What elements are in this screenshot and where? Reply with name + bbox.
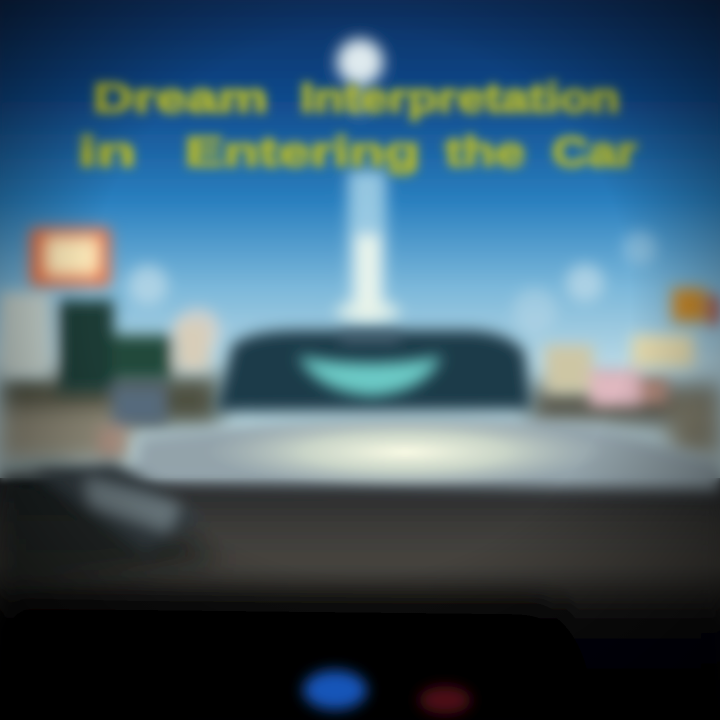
hood of the car xyxy=(130,416,720,490)
blue indicator light xyxy=(303,670,367,710)
right roadside: buildings and sign xyxy=(530,288,720,455)
title: Entering xyxy=(185,128,420,175)
title: the xyxy=(445,128,525,175)
title: Dream xyxy=(93,74,268,121)
car ahead xyxy=(215,330,532,412)
sky background xyxy=(0,0,720,480)
glowing orb at top xyxy=(337,39,383,114)
left roadside: sign, building, trees xyxy=(0,228,220,460)
bokeh circles xyxy=(128,231,657,352)
dashboard base xyxy=(0,478,720,720)
roadside sign xyxy=(30,228,110,286)
dashboard xyxy=(0,465,720,720)
orange sign xyxy=(672,288,720,325)
light beam xyxy=(336,170,400,324)
title: Interpretation xyxy=(300,74,620,121)
sky base xyxy=(0,0,720,480)
red indicator light xyxy=(419,686,471,714)
title: Car xyxy=(552,128,637,175)
title: in xyxy=(78,128,136,175)
title xyxy=(78,74,637,175)
dashboard device xyxy=(30,462,205,552)
